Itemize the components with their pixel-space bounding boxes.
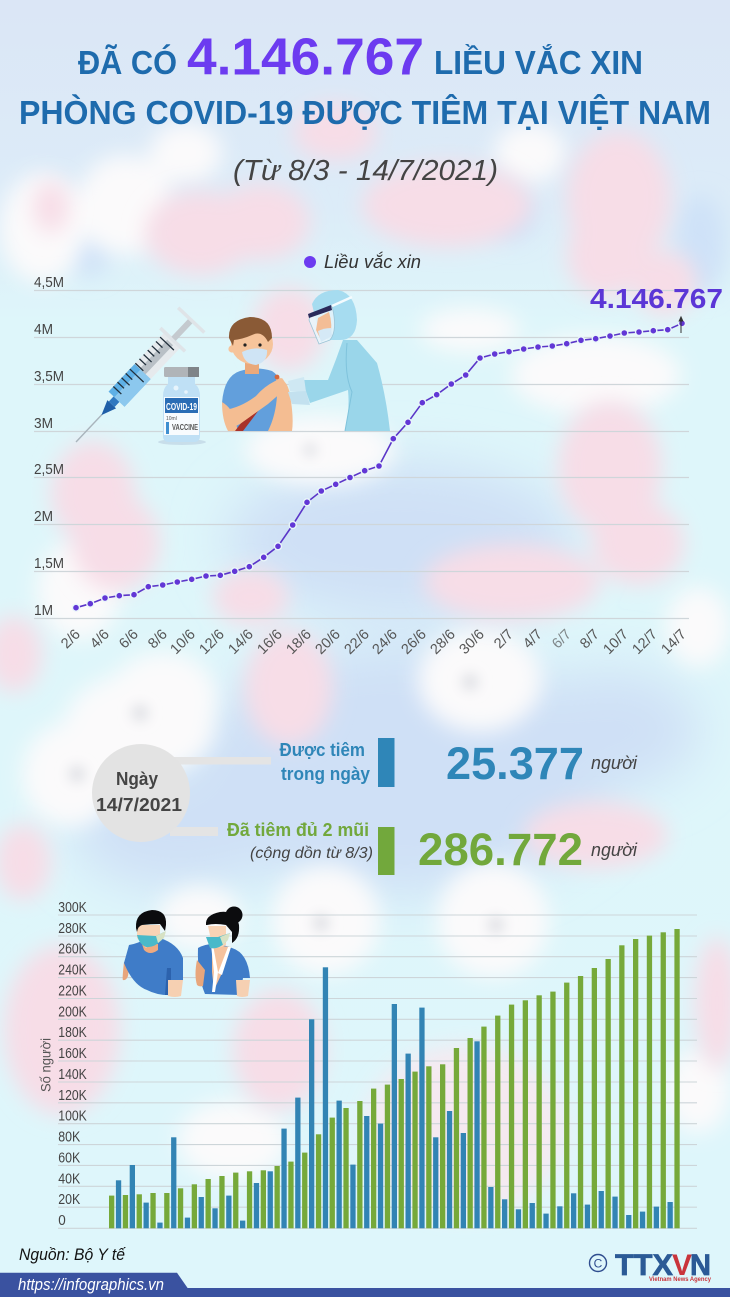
title: ĐÃ CÓ [78,44,177,81]
y axis labels: 40K [58,1171,81,1187]
logo: TTXVN: C [594,1256,603,1270]
icon: vaccine vial: COVID-19 [166,401,197,413]
date circle with connectors [92,744,271,842]
x axis labels: 30/6 [457,627,488,658]
y axis labels: 140K [58,1067,87,1083]
y axis labels: 200K [58,1004,87,1020]
y axis labels: 2,5M [34,461,64,478]
icon: boy receiving vaccine [222,317,293,431]
fully vaccinated stat: (cộng dồn từ 8/3) [250,845,373,862]
title: 4.146.767 [187,28,424,86]
y axis labels: 20K [58,1192,81,1208]
title: LIỀU VẮC XIN [434,44,643,81]
x axis labels: 20/6 [313,627,344,658]
daily doses stat: trong ngày [281,764,370,784]
icon: vaccine vial [158,367,206,445]
bar chart: people vaccinated [38,900,697,1229]
x axis labels: 26/6 [399,627,430,658]
x axis labels: 10/6 [168,627,199,658]
y axis labels: 4M [34,321,53,338]
x axis labels: 2/7 [491,627,517,652]
title [19,28,711,131]
y axis labels [34,274,64,619]
green bars: fully vaccinated [109,929,680,1228]
logo: TTXVN: V [672,1249,692,1282]
title: PHÒNG COVID-19 ĐƯỢC TIÊM TẠI VIỆT NAM [19,94,711,131]
x axis labels: 6/7 [549,627,575,652]
line chart legend: Liều vắc xin [324,252,421,272]
x axis labels: 2/6 [58,627,84,652]
latest value label: 4.146.767 [590,283,723,314]
source note: Nguồn: Bộ Y tế [19,1245,126,1264]
y axis labels: 180K [58,1025,87,1041]
y axis labels: 120K [58,1088,87,1104]
y axis labels: 300K [58,900,87,916]
footer band with website: https://infographics.vn [18,1275,164,1294]
icon: vaccine vial: 10ml [166,416,177,422]
logo: TTXVN [590,1249,712,1283]
fully vaccinated stat: Đã tiêm đủ 2 mũi [227,820,369,840]
y axis labels: 160K [58,1046,87,1062]
x axis labels: 8/6 [145,627,171,652]
y axis labels: 280K [58,921,87,937]
y axis labels [58,900,87,1229]
latest value arrow [679,317,683,333]
x axis labels: 8/7 [577,627,603,652]
y axis labels: 1M [34,602,53,619]
icon: woman with mask [196,906,250,997]
y axis labels: 240K [58,963,87,979]
y axis labels: 3,5M [34,368,64,385]
y axis labels: 3M [34,415,53,432]
x axis labels: 24/6 [370,627,401,658]
x axis labels: 10/7 [601,627,632,658]
y axis labels: 4,5M [34,274,64,291]
date circle with connectors: 14/7/2021 [96,795,182,815]
footer band with website [0,1273,730,1297]
x axis labels: 12/7 [630,627,661,658]
x axis labels: 4/7 [520,627,546,652]
x axis labels: 14/6 [226,627,257,658]
daily doses stat: 25.377 [446,738,584,789]
x axis labels: 4/6 [87,627,113,652]
icon: nurse in protective suit [288,290,390,431]
y axis labels: 260K [58,942,87,958]
date circle with connectors: Ngày [116,769,158,789]
line chart: vaccine doses [34,274,723,658]
fully vaccinated stat: người [591,840,638,860]
y axis labels: 1,5M [34,555,64,572]
x axis labels: 28/6 [428,627,459,658]
y axis labels: 0 [58,1213,66,1229]
icon: vaccine vial: VACCINE [172,423,198,432]
x axis labels: 12/6 [197,627,228,658]
logo: TTXVN: TTX [615,1249,673,1282]
subtitle: date range: (Từ 8/3 - 14/7/2021) [233,155,498,187]
logo: TTXVN: N [690,1249,711,1282]
y axis labels: 2M [34,508,53,525]
daily doses stat [280,738,638,789]
data line [76,323,682,608]
icon: man with mask [123,910,183,997]
x axis labels [58,627,690,658]
x axis labels: 6/6 [116,627,142,652]
fully vaccinated stat: 286.772 [418,824,583,875]
daily doses stat: Được tiêm [280,740,365,760]
daily doses stat: người [591,753,638,773]
x axis labels: 22/6 [342,627,373,658]
x axis labels: 14/7 [659,627,690,658]
y axis labels: 80K [58,1130,81,1146]
y axis labels: 220K [58,984,87,1000]
logo: TTXVN: Vietnam News Agency [649,1277,712,1283]
fully vaccinated stat [227,820,638,875]
stats panel [92,738,638,875]
y axis labels: 60K [58,1150,81,1166]
blue bars: vaccinated per day [116,967,673,1228]
data points [72,320,686,611]
x axis labels: 16/6 [255,627,286,658]
icon: syringe [63,306,206,454]
y axis labels: 100K [58,1109,87,1125]
y axis title: Số người [38,1038,54,1092]
x axis labels: 18/6 [284,627,315,658]
